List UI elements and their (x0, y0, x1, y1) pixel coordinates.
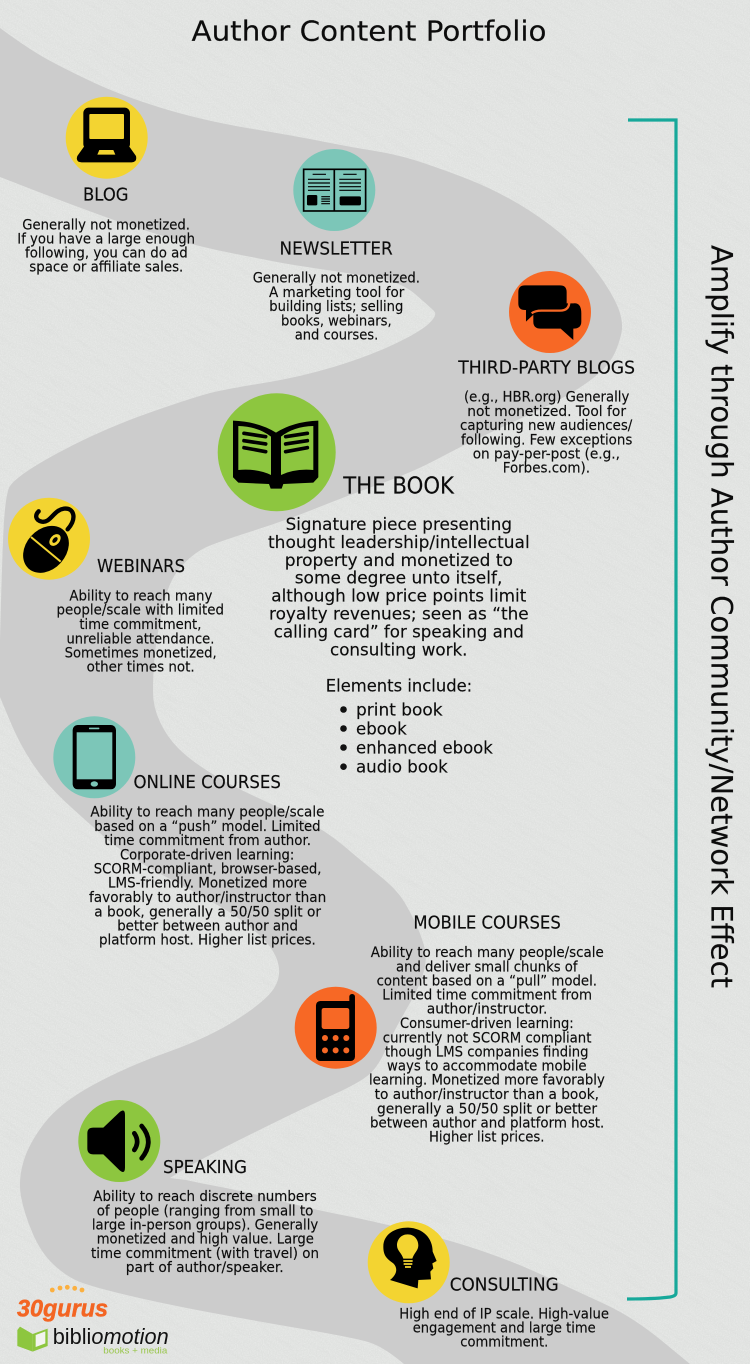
heading: online courses: ONLINE COURSES (134, 772, 281, 793)
text: online courses description: based on a “push” model. Limited (94, 819, 321, 835)
text: newsletter description: building lists; selling (269, 299, 403, 315)
text: webinars description: people/scale with limited (56, 603, 224, 619)
list: book elements: print book (356, 700, 443, 720)
text: online courses description (89, 805, 326, 949)
text: mobile courses description: author/instructor. (427, 1002, 547, 1018)
text: mobile courses description: learning. Monetized more favorably (369, 1073, 605, 1089)
vertical amplify label: Amplify through Author Community/Network Effect (705, 245, 739, 988)
text: book description: calling card” for speaking and (274, 623, 524, 643)
heading: newsletter: NEWSLETTER (280, 238, 393, 259)
text: newsletter description: and courses. (295, 327, 378, 343)
text: mobile courses description: currently not SCORM compliant (383, 1030, 592, 1046)
list: book elements: audio book (356, 758, 448, 778)
text: book description: property and monetized to (285, 551, 513, 571)
bracket (627, 120, 676, 1299)
text: third-party description: Forbes.com). (503, 461, 590, 477)
text: speaking description: monetized and high value. Large (97, 1232, 314, 1248)
text: book description: thought leadership/intellectual (268, 533, 530, 553)
icon: speech bubbles (509, 271, 591, 353)
text: speaking description: part of author/speaker. (126, 1260, 284, 1276)
text: webinars description: Sometimes monetized, (65, 645, 217, 661)
text: consulting description: engagement and large time (413, 1321, 596, 1337)
text: mobile courses description: to author/instructor than a book, (375, 1087, 599, 1103)
text: speaking description: Ability to reach discrete numbers (93, 1189, 317, 1205)
text: online courses description: better between author and (117, 918, 298, 934)
text: blog description: space or affiliate sales. (29, 260, 183, 276)
logo: bibliomotion (17, 1324, 169, 1355)
text: book description: some degree unto itself, (295, 569, 502, 589)
text: book description: consulting work. (330, 641, 468, 661)
text: consulting description: High end of IP scale. High-value (399, 1306, 609, 1322)
panel: the book (218, 393, 530, 778)
text: speaking description: time commitment (with travel) on (91, 1246, 319, 1262)
panel: mobile courses (295, 913, 605, 1146)
text: speaking description (91, 1189, 319, 1276)
icon: laptop (66, 97, 148, 179)
heading: third-party blogs: THIRD-PARTY BLOGS (457, 357, 635, 378)
panel: blog (17, 97, 195, 276)
text: online courses description: Ability to reach many people/scale (90, 805, 324, 821)
text: consulting description (399, 1306, 609, 1351)
text: consulting description: commitment. (460, 1335, 548, 1351)
text: mobile courses description: Limited time commitment from (382, 988, 592, 1004)
text: third-party description: capturing new audiences/ (460, 418, 633, 434)
panel: newsletter (253, 149, 420, 343)
heading: blog: BLOG (83, 185, 128, 206)
text: third-party description: on pay-per-post (e.g., (473, 447, 620, 463)
text: mobile courses description: content based on a “pull” model. (377, 973, 597, 989)
text: third-party description: (e.g., HBR.org) Generally (464, 390, 629, 406)
text: online courses description: Corporate-driven learning: (120, 847, 294, 863)
heading: mobile courses: MOBILE COURSES (413, 913, 561, 934)
text: webinars description: unreliable attendance. (66, 631, 214, 647)
text: webinars description: time commitment, (79, 617, 201, 633)
text: third-party description: not monetized. Tool for (467, 404, 626, 420)
text: online courses description: favorably to author/instructor than (89, 890, 326, 906)
text: book description: although low price points limit (271, 587, 527, 607)
text: newsletter description: books, webinars, (281, 313, 392, 329)
logo: bibliomotion: bibliomotion (53, 1324, 169, 1349)
list: book elements (340, 700, 493, 778)
text: blog description: Generally not monetized. (22, 217, 190, 233)
text: book description: Signature piece presenting (286, 515, 512, 535)
heading: the book: THE BOOK (342, 473, 455, 499)
text: mobile courses description: though LMS companies finding (385, 1044, 588, 1060)
text: online courses description: time commitment from author. (104, 833, 311, 849)
icon: open book (218, 393, 336, 511)
icon: newsletter spread (293, 149, 375, 231)
panel: webinars (8, 498, 224, 676)
title: Author Content Portfolio (192, 15, 546, 48)
text: webinars description: other times not. (87, 660, 195, 676)
heading: consulting: CONSULTING (450, 1275, 559, 1296)
text: newsletter description (253, 271, 420, 343)
text: speaking description: large in-person groups). Generally (92, 1218, 318, 1234)
text: speaking description: of people (ranging from small to (97, 1203, 313, 1219)
panel: consulting (368, 1221, 609, 1351)
icon: head with lightbulb (368, 1221, 450, 1303)
text: mobile courses description: Higher list prices. (429, 1130, 544, 1146)
text: mobile courses description (369, 945, 605, 1146)
heading: webinars: WEBINARS (97, 556, 185, 577)
text: online courses description: a book, generally a 50/50 split or (94, 904, 321, 920)
icon: speaker (78, 1100, 160, 1182)
text: mobile courses description: and deliver small chunks of (396, 959, 579, 975)
text: newsletter description: Generally not monetized. (253, 271, 420, 287)
text: newsletter description: A marketing tool for (269, 285, 405, 301)
text: elements include: Elements include: (326, 676, 472, 696)
text: blog description (17, 217, 195, 276)
text: online courses description: platform host. Higher list prices. (99, 933, 316, 949)
text: mobile courses description: Ability to reach many people/scale (371, 945, 604, 961)
text: mobile courses description: ways to accommodate mobile (387, 1059, 587, 1075)
list: book elements: ebook (356, 719, 407, 739)
heading: speaking: SPEAKING (163, 1157, 247, 1178)
text: book description (268, 515, 530, 661)
panel: speaking (78, 1100, 319, 1276)
logo: 30gurus: 30gurus (17, 1296, 108, 1323)
icon: smartphone (53, 716, 135, 798)
text: mobile courses description: generally a 50/50 split or better (377, 1101, 597, 1117)
text: webinars description: Ability to reach many (69, 589, 212, 605)
text: blog description: following, you can do ad (25, 246, 188, 262)
text: mobile courses description: between author and platform host. (370, 1115, 604, 1131)
text: book description: royalty revenues; seen as “the (269, 605, 529, 625)
text: blog description: If you have a large enough (17, 232, 195, 248)
text: webinars description (56, 589, 224, 676)
panel: online courses (53, 716, 326, 949)
text: third-party description (460, 390, 633, 477)
icon: mouse (8, 498, 90, 582)
panel: third-party blogs (457, 271, 635, 477)
icon: mobile phone (295, 987, 377, 1069)
text: third-party description: following. Few exceptions (461, 432, 632, 448)
list: book elements: enhanced ebook (356, 739, 493, 759)
logo: bibliomotion: books + media (103, 1345, 167, 1355)
text: online courses description: SCORM-compliant, browser-based, (94, 862, 322, 878)
text: online courses description: LMS-friendly. Monetized more (108, 876, 307, 892)
text: mobile courses description: Consumer-driven learning: (400, 1016, 574, 1032)
